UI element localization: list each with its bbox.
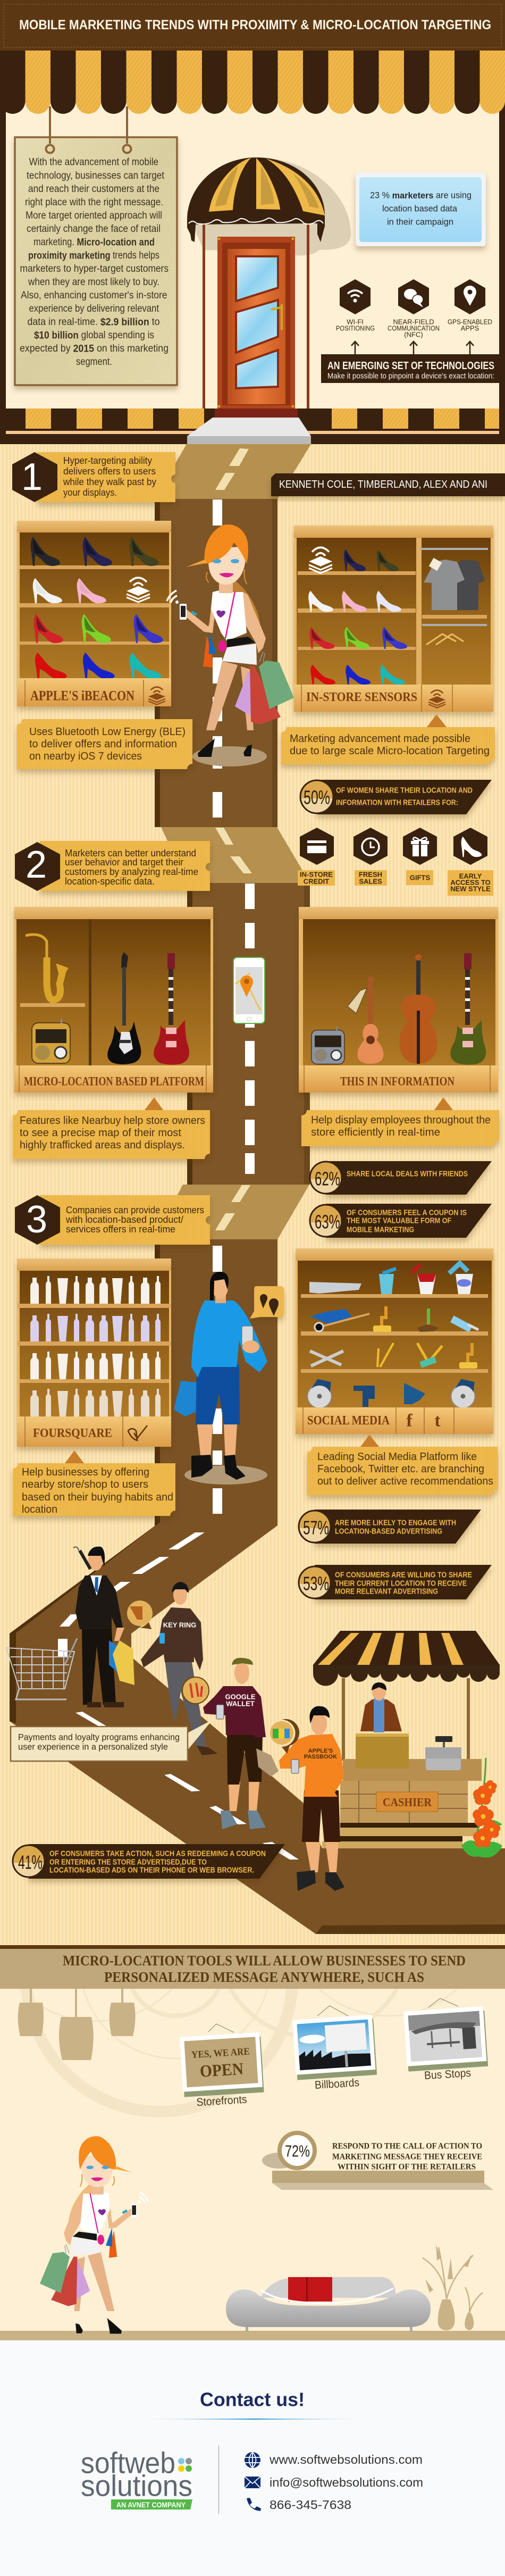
man in blue hoodie — [174, 1272, 284, 1485]
sofa — [226, 2277, 431, 2332]
callout: payments and loyalty: user experience in a personalized style — [18, 1741, 168, 1752]
frame: billboards — [292, 2006, 377, 2091]
shelf sign — [299, 1065, 498, 1093]
stat: 72% on wall shelf: WITHIN SIGHT OF THE RETAILERS — [338, 2163, 476, 2171]
intro text: marketing. Micro-location and — [33, 237, 155, 248]
callout: in-store sensors: Marketing advancement made possible — [290, 733, 470, 745]
blue stat box: 23 % marketers are using — [370, 190, 472, 200]
callout: in-store sensors: due to large scale Micro-location Targeting — [290, 745, 490, 757]
section heading band — [0, 1945, 505, 1989]
man with Apple's Passbook hoodie: APPLE'S — [308, 1748, 333, 1754]
shelf: micro-location based platform — [14, 907, 213, 1093]
shopping cart — [6, 1638, 77, 1699]
shelf sign: SOCIAL MEDIA — [307, 1414, 390, 1428]
cashier person — [360, 1682, 402, 1732]
speech bubble — [250, 1286, 284, 1319]
icon: new style: ACCESS TO — [450, 879, 491, 886]
shelf sign: IN-STORE SENSORS — [306, 690, 417, 704]
cashier sign: CASHIER — [383, 1796, 432, 1808]
speech bubble: keys — [127, 1599, 153, 1629]
stat: 53% — [299, 1565, 492, 1599]
stat: 72% on wall shelf — [262, 2133, 493, 2190]
blue stat box — [356, 172, 486, 246]
stat: 63%: THE MOST VALUABLE FORM OF — [347, 1216, 451, 1226]
step 2 label: 2 — [26, 844, 47, 886]
intro text: proximity marketing trends helps — [28, 250, 159, 261]
callout: iBeacon — [17, 719, 192, 769]
door step — [187, 409, 311, 444]
awning stripes — [0, 51, 505, 114]
callout: in-store sensors — [281, 714, 495, 764]
tools row 4 — [307, 1379, 475, 1408]
callout: nearbuy: highly trafficked areas and displays. — [20, 1139, 185, 1151]
step 3 hexagon — [15, 1195, 60, 1245]
intro text — [20, 156, 169, 368]
shelf sign — [294, 685, 493, 712]
intro text: and reach their customers at the — [28, 184, 159, 195]
man with Apple's Passbook hoodie — [270, 1706, 344, 1891]
speech bubble: google wallet — [182, 1677, 209, 1704]
frame: storefronts: Storefronts — [196, 2094, 247, 2108]
radio gold — [32, 1019, 70, 1063]
road segment 2 — [155, 883, 310, 1239]
woman with shopping bags — [167, 524, 294, 766]
step 3 label — [15, 1195, 210, 1245]
icon: in-store credit: IN-STORE — [300, 870, 333, 879]
violin — [399, 954, 437, 1064]
door handle — [271, 304, 282, 330]
technologies: NFC: (NFC) — [404, 331, 423, 338]
cashier stall — [313, 1631, 502, 1857]
blue stat box: in their campaign — [387, 217, 453, 227]
shelf sign — [17, 1416, 171, 1447]
callout: display employees — [301, 1097, 499, 1146]
lower stripes — [0, 409, 505, 444]
shelf sign: APPLE'S iBEACON — [30, 688, 134, 703]
flowers — [461, 1758, 502, 1857]
intro text: expected by 2015 on this marketing — [20, 343, 169, 354]
shelf sign — [14, 1065, 213, 1093]
shelf: in-store sensors — [294, 526, 493, 712]
callout: iBeacon: on nearby iOS 7 devices — [29, 751, 142, 762]
callout: social media: Leading Social Media Platform like — [317, 1451, 477, 1463]
counter — [322, 1733, 482, 1848]
technologies: GPS — [448, 279, 492, 354]
stat: 57%: ARE MORE LIKELY TO ENGAGE WITH — [335, 1518, 456, 1528]
stat: 41%: OR ENTERING THE STORE ADVERTISED,DUE TO — [49, 1857, 207, 1867]
technologies: Wi-Fi — [336, 279, 375, 354]
step 1 label: while they walk past by — [63, 477, 156, 487]
stat: 53%: THEIR CURRENT LOCATION TO RECEIVE — [335, 1579, 467, 1588]
emerging technologies box — [321, 354, 499, 383]
callout: display employees: Help display employees throughout the — [311, 1114, 491, 1126]
frame: storefronts — [180, 2024, 264, 2108]
shelf sign — [17, 678, 171, 706]
man with key ring hoodie — [127, 1582, 217, 1755]
clothes rail with shirts — [420, 548, 488, 645]
icon: gifts: GIFTS — [410, 873, 430, 882]
contact: website: www.softwebsolutions.com — [269, 2453, 423, 2466]
stat: 57%: 57% — [303, 1517, 329, 1538]
road segment 3 — [10, 1239, 505, 1934]
man with Google Wallet hoodie: WALLET — [226, 1700, 255, 1707]
stat: 41%: OF CONSUMERS TAKE ACTION, SUCH AS REDEEMING A COUPON — [49, 1849, 266, 1858]
callout: foursquare: location — [22, 1504, 57, 1515]
stat: 53%: MORE RELEVANT ADVERTISING — [335, 1587, 438, 1596]
frame: bus stops: Bus Stops — [424, 2067, 472, 2082]
icon: in-store credit: CREDIT — [304, 878, 329, 885]
stat: 50%: INFORMATION WITH RETAILERS FOR: — [336, 798, 458, 807]
stall awning — [313, 1631, 500, 1686]
step 2 label: location-specific data. — [65, 876, 155, 887]
dome awning — [187, 157, 351, 409]
woman in room — [40, 2136, 148, 2334]
stat: 63% — [310, 1204, 492, 1238]
brands banner — [271, 473, 505, 496]
stat: 50% — [300, 780, 492, 814]
intro text: technology, businesses can target — [27, 170, 165, 181]
logo: AN AVNET COMPANY — [116, 2500, 186, 2509]
intro text: right place with the right message. — [25, 197, 163, 208]
frame: billboards: Billboards — [314, 2077, 360, 2091]
step 1 hexagon — [12, 452, 57, 502]
intro text: With the advancement of mobile — [29, 156, 158, 168]
red guitar — [154, 953, 189, 1065]
section heading band: MICRO-LOCATION TOOLS WILL ALLOW BUSINESSES TO SEND — [63, 1953, 466, 1969]
callout: social media: out to deliver active recommendations — [317, 1475, 493, 1487]
vases with dry plants — [423, 2245, 483, 2330]
callout: payments and loyalty: Payments and loyalty programs enhancing — [18, 1732, 180, 1743]
room background — [0, 1989, 505, 2340]
step 1 label: delivers offers to users — [63, 466, 156, 477]
icon: new style: NEW STYLE — [450, 885, 491, 893]
shelf: Apple's iBeacon — [17, 521, 171, 706]
shelf sign: FOURSQUARE — [33, 1427, 112, 1439]
intro text: Also, enhancing customer's in-store — [21, 290, 167, 301]
intro text: data in real-time. $2.9 billion to — [28, 316, 159, 328]
shelf sign: MICRO-LOCATION BASED PLATFORM — [24, 1074, 204, 1088]
stat: 62% — [310, 1161, 492, 1195]
step 3 label: 3 — [26, 1198, 47, 1241]
intro text: marketers to hyper-target customers — [20, 263, 169, 274]
frame: storefronts: OPEN — [199, 2059, 244, 2081]
contact: phone: 866-345-7638 — [270, 2498, 351, 2512]
logo: softweb — [81, 2446, 175, 2480]
callout: display employees: store efficiently in real-time — [311, 1127, 440, 1138]
contact: email: info@softwebsolutions.com — [270, 2475, 423, 2489]
callout: nearbuy: to see a precise map of their most — [20, 1127, 181, 1139]
stat: 63%: MOBILE MARKETING — [347, 1226, 414, 1234]
shoes — [31, 537, 163, 679]
step 2 label: user behavior and target their — [65, 857, 183, 868]
stat: 63%: 63% — [315, 1211, 340, 1233]
step 2 hexagon — [15, 842, 60, 891]
stat: 62%: SHARE LOCAL DEALS WITH FRIENDS — [347, 1169, 468, 1179]
frame: bus stops — [403, 1998, 488, 2082]
section heading band: PERSONALIZED MESSAGE ANYWHERE, SUCH AS — [104, 1969, 424, 1985]
technologies: GPS: GPS-ENABLED — [448, 318, 492, 326]
icon: in-store credit — [298, 828, 335, 886]
man with Google Wallet hoodie: GOOGLE — [225, 1693, 256, 1701]
technologies: NFC: NEAR-FIELD — [393, 318, 434, 326]
man with Google Wallet hoodie — [182, 1658, 279, 1829]
callout: foursquare: based on their buying habits and — [22, 1491, 173, 1503]
icon: new style — [448, 828, 493, 896]
hanging lamps — [18, 1989, 136, 2060]
callout: payments and loyalty — [11, 1720, 213, 1761]
technologies: Wi-Fi: POSITIONING — [336, 324, 375, 332]
stat: 41%: 41% — [18, 1851, 43, 1873]
frame: storefronts: YES, WE ARE — [191, 2046, 250, 2061]
shelf sign — [296, 1407, 493, 1434]
callout: foursquare — [13, 1450, 175, 1516]
man with key ring hoodie: KEY RING — [163, 1621, 196, 1629]
technologies: Wi-Fi: WI-FI — [347, 318, 364, 326]
stat: 72% on wall shelf: RESPOND TO THE CALL OF ACTION TO — [332, 2141, 482, 2151]
speech bubble: passbook — [270, 1719, 299, 1754]
phone with map pin — [233, 957, 265, 1023]
shoes — [308, 547, 407, 685]
green guitar — [450, 953, 486, 1065]
tools row 2 — [310, 1306, 478, 1332]
divider line — [218, 2446, 219, 2514]
callout: social media: Facebook, Twitter etc. are branching — [317, 1463, 484, 1475]
saxophone — [26, 935, 68, 1000]
stall posts — [342, 1678, 470, 1761]
tools row 1 — [309, 1263, 473, 1294]
door — [215, 237, 298, 418]
road segment 1 — [155, 444, 311, 883]
logo — [81, 2446, 192, 2510]
step 3 label: Companies can provide customers — [66, 1205, 204, 1215]
radio grey — [312, 1027, 344, 1064]
stat: 53%: OF CONSUMERS ARE WILLING TO SHARE — [335, 1570, 472, 1580]
shelf sign: THIS IN INFORMATION — [340, 1074, 454, 1088]
step 2 label: Marketers can better understand — [65, 848, 196, 858]
cashier sign — [376, 1792, 438, 1812]
icon: fresh sales: FRESH — [359, 870, 382, 879]
stat: 72% on wall shelf: MARKETING MESSAGE THEY RECEIVE — [332, 2152, 482, 2162]
callout: social media — [307, 1435, 498, 1495]
shelf: this in information — [299, 907, 498, 1093]
businessman with cart — [6, 1547, 134, 1707]
black guitar — [107, 952, 141, 1064]
shelf: social media — [296, 1248, 493, 1434]
stat: 50%: OF WOMEN SHARE THEIR LOCATION AND — [336, 786, 473, 795]
acoustic guitar — [348, 977, 384, 1064]
callout: nearbuy: Features like Nearbuy help store owners — [20, 1115, 205, 1127]
hanging paper sign — [15, 106, 177, 385]
man with Apple's Passbook hoodie: PASSBOOK — [304, 1754, 337, 1760]
tools row 3 — [310, 1343, 477, 1369]
door glass panels — [236, 256, 278, 388]
stat: 57%: LOCATION-BASED ADVERTISING — [335, 1527, 442, 1536]
step 1 label: Hyper-targeting ability — [63, 455, 152, 466]
technologies: NFC — [388, 279, 440, 354]
technologies: GPS: APPS — [461, 324, 479, 332]
header banner — [0, 0, 505, 51]
stat: 63%: OF CONSUMERS FEEL A COUPON IS — [347, 1208, 467, 1217]
step 3 label: with location-based product/ — [65, 1214, 183, 1225]
icon: gifts — [403, 828, 437, 885]
stat: 41%: LOCATION-BASED ADS ON THEIR PHONE OR WEB BROWSER. — [49, 1866, 254, 1874]
intro text: segment. — [76, 356, 112, 368]
step 2 label — [15, 841, 210, 891]
contact heading: Contact us! — [200, 2388, 305, 2411]
stat: 50%: 50% — [304, 786, 330, 808]
icon: fresh sales — [354, 828, 388, 886]
intro text: experience by delivering relevant — [29, 303, 159, 314]
logo: solutions — [81, 2469, 192, 2502]
intro text: certainly change the face of retail — [27, 223, 161, 235]
callout: iBeacon: Uses Bluetooth Low Energy (BLE) — [29, 726, 186, 738]
icon: fresh sales: SALES — [359, 878, 382, 885]
shelf sign: t — [434, 1411, 441, 1431]
stat: 53%: 53% — [303, 1572, 329, 1595]
icon: new style: EARLY — [459, 872, 482, 880]
technologies: NFC: COMMUNICATION — [388, 324, 440, 332]
intro text: $10 billion global spending is — [34, 330, 154, 341]
shelf: foursquare — [17, 1258, 171, 1447]
stat: 62%: 62% — [315, 1168, 340, 1189]
step 1 label: your displays. — [63, 487, 117, 498]
callout: nearbuy — [13, 1097, 210, 1159]
callout: iBeacon: to deliver offers and information — [29, 738, 177, 750]
step 2 label: customers by analyzing real-time — [65, 866, 198, 877]
cash register — [425, 1736, 461, 1770]
stat: 41% — [13, 1844, 285, 1879]
stat: 72% on wall shelf: 72% — [285, 2141, 310, 2161]
step 3 label: services offers in real-time — [66, 1224, 175, 1235]
blue stat box: location based data — [382, 203, 458, 214]
step 1 label — [12, 452, 175, 502]
callout: foursquare: nearby store/shop to users — [22, 1479, 148, 1490]
shelf sign: f — [406, 1411, 413, 1431]
intro text: More target oriented approach will — [26, 210, 162, 221]
intro text: when they are most likely to buy. — [28, 277, 159, 288]
bottles — [30, 1276, 161, 1416]
step 1 label: 1 — [21, 456, 43, 498]
stat: 57% — [299, 1510, 481, 1544]
callout: foursquare: Help businesses by offering — [22, 1466, 149, 1478]
